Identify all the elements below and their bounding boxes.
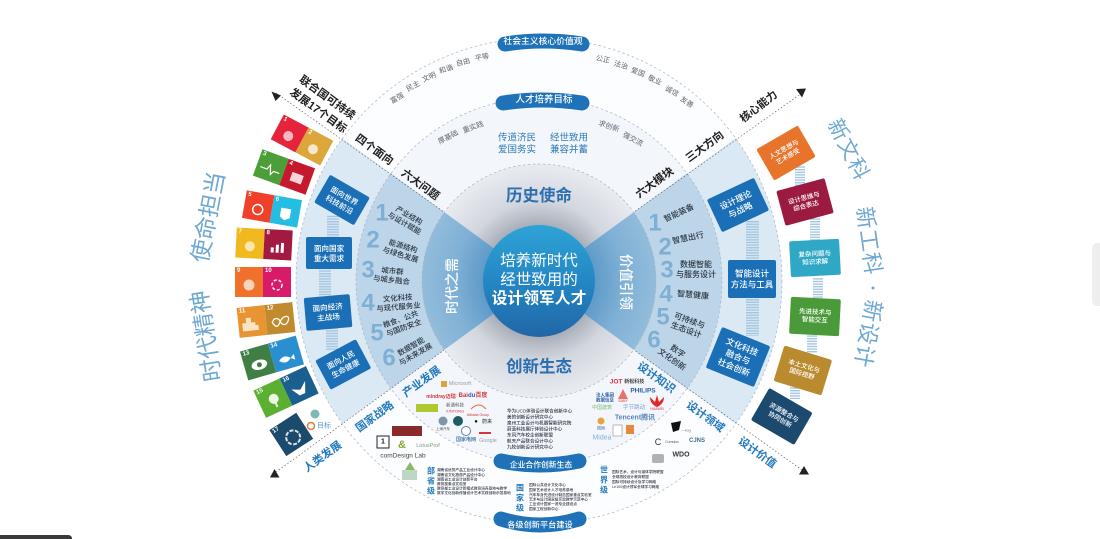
list: world level: 全球高校设计教育联盟 [612,474,649,479]
list: six modules: 5 [656,304,670,330]
SDG tiles: 12 [267,305,274,312]
boxes: three directions: 方法与工具 [731,280,774,290]
axis labels: lower [300,359,780,475]
SDG tiles: 1 [282,116,289,123]
springs connecting boxes [319,165,823,399]
list: six issues: 产业结构 [394,204,424,226]
panel: left inner sector [422,212,539,350]
list: national level: 工业设计国家一流专业建设点 [529,501,577,506]
logos: design knowledge: Midea [592,434,612,442]
boxes: core abilities [751,125,841,445]
SDG tiles: 2 [307,129,313,137]
text: socialist values right: 诚信 [664,84,680,98]
list: enterprise cooperation: 东风汽车校企创新联盟 [507,432,553,438]
logos: industry: 新通科技 [446,402,464,408]
logos: design knowledge: 数据信息 [596,396,614,403]
logos: design knowledge: Tencent腾讯 [615,412,655,422]
logos: design knowledge: PHILIPS [630,388,656,394]
inner gray ring [422,164,656,398]
logos: design field: CJNS [689,438,705,444]
text: socialist values right: 友善 [679,94,695,110]
list: six issues: 5 [370,320,384,346]
list: national level: 家 [516,492,524,502]
axis labels: upper: 核心能力 [737,87,780,125]
list: six modules: 4 [659,280,673,308]
list: national level: 国家工程创新中心 [529,506,559,511]
boxes: three directions: 融合与 [724,348,752,366]
big title: 新设计: 新设计 [850,298,886,370]
text: talent goal left [498,132,536,156]
boxes: core abilities: 艺术感受 [774,145,801,166]
screenshot edge: bottom bar [0,535,72,539]
logos: design field: WDO [672,452,690,458]
text: talent goals keywords: 强交流 [621,130,645,148]
list: six issues: 1 [375,200,389,226]
boxes: four directions: 科技前沿 [324,192,356,216]
list: world level: 界 [600,476,608,484]
logos: industry: XINTONG [446,408,464,414]
logos: industry [416,381,497,444]
logos: design knowledge: SANY [618,399,628,403]
boxes: three directions: 社会创新 [716,356,752,378]
boxes: core abilities: 先进技术与 [799,306,832,316]
heading: 创新生态: 创新生态 [506,356,572,376]
boxes: four directions: 主战场 [317,310,341,322]
logos: industry: Google [479,438,497,444]
SDG tiles: 3 [262,151,268,158]
logos: design field [652,421,705,463]
pill: 企业合作创新生态: 企业合作创新生态 [510,460,572,470]
list: provincial level: 部 [427,466,435,476]
logos: national strategy: LotusProf [416,443,440,449]
list: six modules [647,201,716,372]
list: enterprise cooperation: 泉州工业设计与机器智能研究院 [507,420,572,426]
SDG tiles: 6 [275,197,280,203]
SDG tiles: 目标 [317,420,331,430]
list: six issues: 文化科技 [382,292,413,303]
boxes: core abilities: 设计思维与 [787,189,821,206]
axis labels: lower: 国家战略 [352,398,396,435]
boxes: core abilities: 综合表达 [792,197,820,213]
boxes: core abilities: 国际视野 [788,365,816,381]
heading: 时代之需: 时代之需 [444,258,460,314]
text: talent goal left: 爱国务实 [498,144,536,156]
axis labels: lower: 设计领域 [684,398,728,435]
list: national level: 国 [516,484,524,492]
list: six modules: 1 [648,210,662,236]
logos: design knowledge: 中国建筑 [592,404,612,411]
list: provincial level: 教育部重点实验室 [437,481,467,486]
list: six modules: 数据智能 [680,258,712,268]
panel: right outer sector [539,138,782,424]
list: world level: 国际艺术、设计与媒体学院联盟 [612,469,664,474]
list: six issues: 城市群 [381,265,405,276]
text: socialist values right: 法治 [613,59,629,71]
pill: 各级创新平台建设: 各级创新平台建设 [507,520,573,530]
text: socialist values left: 文明 [421,70,437,84]
list: six modules: 生态设计 [670,319,703,339]
list: world level: Le100设计领军全球学习网络 [612,484,659,489]
text: talent goal right: 兼容并蓄 [550,144,588,156]
list: world level: 世 [600,464,608,474]
pill: 社会主义核心价值观: 社会主义核心价值观 [503,35,583,46]
center circle: 培养新时代 [500,252,578,270]
list: national level: 国际公共设计文化中心 [529,482,566,487]
SDG tiles: 11 [239,308,246,315]
boxes: four directions: 面向人民 [325,347,357,371]
boxes: three directions [706,178,776,387]
boxes: core abilities: 人文思想与 [767,137,800,161]
logos: industry: ● [474,419,478,425]
axis labels: upper: 四个面向 [353,131,397,168]
SDG tiles: 10 [265,268,272,274]
text: talent goal left: 传道济民 [498,132,536,144]
list: six issues: 与国防安全 [385,316,423,338]
list: provincial level: 教育部工业设计新模式教育培养基地与教学 [437,486,507,490]
boxes: four directions [304,175,371,390]
list: six issues: 能源结构 [388,237,419,254]
big title: 新文科: 新文科 [823,115,873,185]
list: enterprise cooperation: 蔚蓝科技展厅体验设计中心 [507,426,563,432]
axis labels: lower: 设计知识 [635,359,679,396]
list: six issues: 与设计赋能 [386,210,424,236]
boxes: core abilities: 协同创新 [767,408,794,429]
list: six modules: 2 [658,234,672,260]
list: provincial level: 湖南省优势产品工业设计中心 [437,467,485,472]
center circle: 设计领军人才 [492,288,586,308]
boxes: three directions: 智能设计 [735,268,769,278]
big title: 时代精神: 时代精神 [186,289,226,383]
axis labels: upper: 三大方向 [682,128,726,165]
logos: design knowledge: 字节跳动 [623,403,645,411]
list: enterprise cooperation [507,408,572,450]
logos: industry: 上海汽车 [436,426,450,431]
list: national level: 国家艺术设计人才培养基地 [529,487,574,492]
SDG tiles [235,114,333,456]
text: socialist values left: 自由 [455,56,471,68]
logos: national strategy: comDesign Lab [380,452,426,460]
list: six issues: 3 [361,256,375,284]
SDG tiles: 5 [248,192,253,198]
list: national level: 级 [516,502,524,512]
boxes: four directions: 面向世界 [329,183,361,207]
list: six issues: 2 [366,226,380,254]
list: enterprise cooperation: 美的创新设计研究中心 [507,414,553,420]
list: six modules: 智慧出行 [671,229,705,246]
SDG tiles: 8 [266,230,271,236]
big title: 新工科: 新工科 [852,205,886,277]
panel: left middle sector [356,173,539,389]
boxes: core abilities: 复杂问题与 [798,248,831,258]
logos: design field: —log [681,428,691,432]
list: enterprise cooperation: 航天产品联合设计中心 [507,438,553,444]
boxes: core abilities: 智能交互 [802,314,829,324]
text: talent goals keywords: 求创新 [597,118,621,134]
logos: industry: mindray迈瑞 [426,393,456,400]
middle circle background [356,98,722,464]
SDG tiles: 13 [242,350,251,358]
logos: design knowledge: 国网 [597,424,605,430]
list: six issues: 4 [361,290,375,316]
arrow: upper right [796,88,806,98]
boxes: four directions: 生命健康 [329,356,361,380]
list: six issues: 与现代服务业 [376,300,421,313]
logos: design knowledge [592,378,664,442]
list: world level: 国际可持续设计及学习网络 [612,479,657,484]
boxes: four directions: 面向经济 [312,300,343,313]
boxes: three directions: 设计理论 [718,188,754,212]
list: national level: 汽车车身先进设计制造国家重点实验室 [529,492,592,497]
logos: industry: 蔚来 [482,418,492,425]
list: six modules: 6 [647,326,661,354]
list: provincial level [427,466,511,496]
SDG tiles: 14 [270,342,279,350]
logos: design field: Cumulus [665,440,679,444]
logos: industry: Alibaba Group [467,413,489,417]
boxes: core abilities: 本土文化与 [788,356,821,374]
axis labels: upper: 发展17个目标 [287,85,350,136]
list: six issues: 数据智能 [396,335,426,357]
text: talent goal right: 经世致用 [550,132,588,144]
list: six modules: 3 [660,256,674,284]
list: provincial level: 数字文化创新传播设计艺术实践创新示范基地 [437,490,511,495]
logos: design knowledge: HUAWEI [650,407,664,411]
logos: national strategy: & [398,439,406,451]
SDG tiles: 17 [272,426,281,435]
panel: right inner sector [539,212,656,350]
arrow: lower left [270,469,280,478]
list: six issues: 6 [382,344,396,372]
list: six modules: 与服务设计 [676,268,716,278]
list: six issues: 与未来发展 [397,340,434,367]
text: socialist values left [389,51,490,105]
text: talent goal right [550,132,588,156]
list: six modules: 智能装备 [662,201,695,224]
text: talent goals keywords: 重实践 [461,119,485,135]
dot separator [872,286,874,290]
center circle [483,225,595,337]
text: socialist values left: 平等 [474,51,490,63]
text: talent goals keywords [436,118,645,148]
boxes: four directions: 面向国家 [314,242,345,252]
panel: right middle sector [539,173,722,389]
logos: national strategy [377,426,440,480]
list: six modules: 文化创新 [656,345,688,372]
boxes: three directions: 与战略 [727,200,754,220]
SDG tiles: 9 [237,268,241,274]
list: provincial level: 级 [427,486,435,496]
boxes: four directions: 重大需求 [314,252,345,262]
logos: industry: 国家电网 [456,436,476,443]
heading: 价值引领: 价值引领 [618,254,634,310]
text: socialist values right: 敬业 [647,73,663,87]
text: socialist values right: 爱国 [630,65,646,79]
boxes: core abilities: 知识求解 [802,256,829,266]
list: six issues: 粮食、公共 [382,308,420,329]
logos: design knowledge: JOT 新松科技 [610,378,644,386]
text: talent goals keywords: 厚基础 [436,128,460,146]
logos: industry: Baidu百度 [459,391,487,399]
screenshot edge: right tab [1092,243,1100,306]
text: socialist values left: 民主 [405,79,421,93]
pill: 人才培养目标 [503,94,582,106]
center circle: 经世致用的 [500,270,578,288]
boxes: core abilities: 资源整合与 [768,400,801,424]
list: provincial level: 湖南省工业设计创新平台 [437,476,478,482]
list: enterprise cooperation: 华为UCD体验设计联合创新中心 [507,408,572,414]
list: national level [516,482,592,512]
text: socialist values right: 公正 [595,53,611,65]
SDG tiles: 7 [238,229,243,235]
list: six issues [361,200,434,372]
outer circle background [296,38,782,524]
text: socialist values right [595,53,695,110]
SDG tiles: 16 [282,375,291,384]
logos: industry: Microsoft [449,381,472,387]
arrow: lower right [799,466,809,474]
list: national level: 艺术与设计国家级实验教学示范中心 [529,496,588,502]
list: six modules: 可持续与 [673,310,707,330]
list: six modules: 智慧健康 [677,288,709,301]
axis labels: upper [287,72,780,203]
SDG tiles: 15 [256,388,265,396]
list: provincial level: 省 [427,476,435,486]
text: socialist values left: 富强 [389,91,405,105]
list: six issues: 与绿色发展 [382,245,420,264]
axis labels: lower: 人类发展 [300,438,344,475]
axis labels: lower: 设计价值 [736,434,780,471]
logos: design knowledge: 法人集团 [596,391,614,398]
axis labels: upper: 六大模块 [632,164,676,201]
list: provincial level: 湖南省文化旅游产品设计中心 [437,472,485,477]
list: world level: 级 [600,484,608,494]
axis labels: lower: 产业发展 [399,363,443,400]
SDG tiles: 4 [288,160,294,167]
pill: 人才培养目标: 人才培养目标 [515,94,573,106]
heading: 历史使命: 历史使命 [506,185,572,205]
list: enterprise cooperation: 九牧创新设计研究中心 [507,444,553,450]
axis labels: upper: 联合国可持续 [297,72,358,122]
list: world level [600,464,664,494]
boxes: three directions: 文化科技 [724,336,760,358]
logos: national strategy: 1 [381,438,385,446]
list: six modules: 数字 [669,342,688,359]
list: six issues: 与城乡融合 [373,273,411,286]
axis labels: upper: 六大问题 [399,166,443,203]
text: socialist values left: 和谐 [438,62,454,76]
big title: 使命担当: 使命担当 [186,169,230,265]
logos: design field: C [655,437,662,447]
panel: left outer sector [296,138,539,424]
arrow: upper left [272,92,281,101]
